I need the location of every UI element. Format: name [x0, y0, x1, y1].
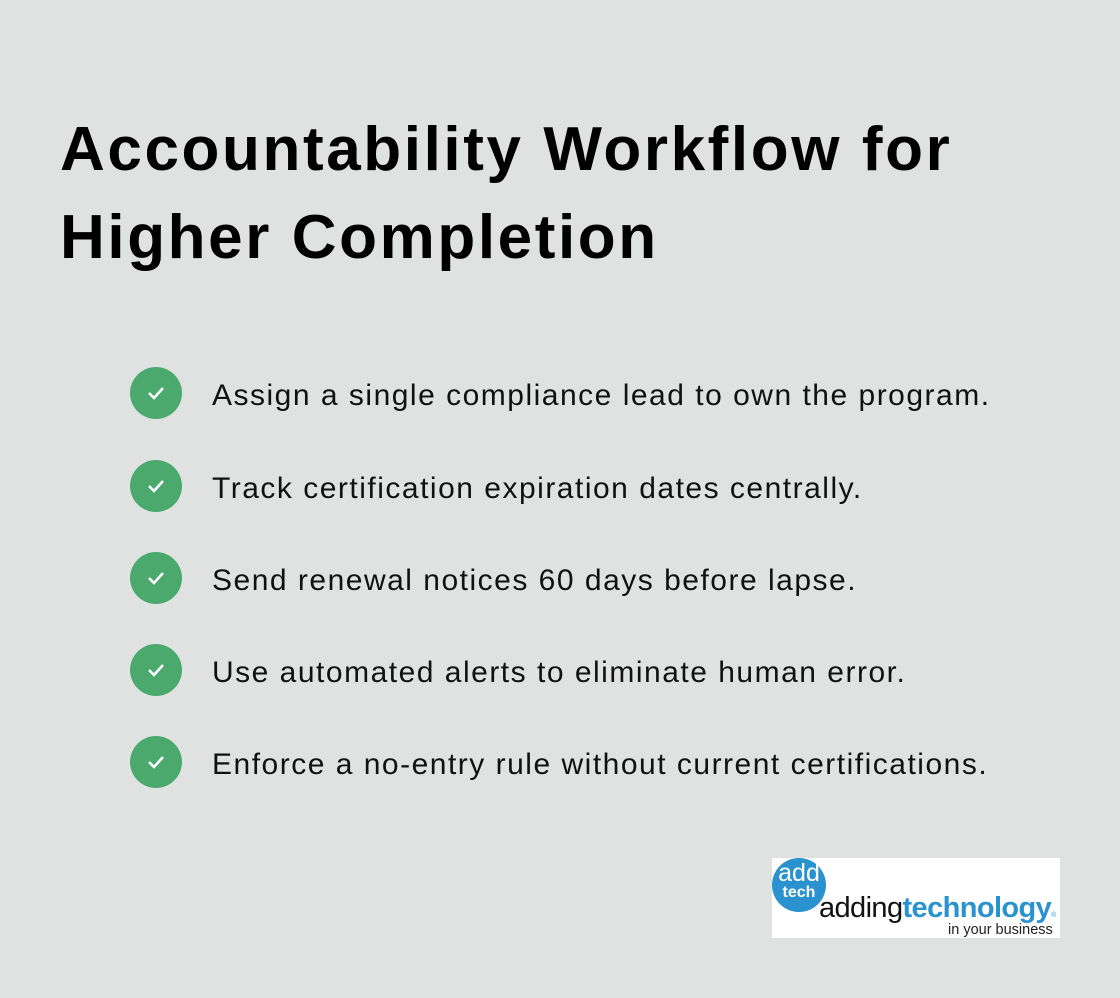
item 2 — [130, 460, 863, 512]
logo: in your business — [948, 922, 1053, 938]
item 3 — [130, 552, 857, 604]
title: Higher Completion — [60, 203, 659, 272]
item 1 — [130, 367, 991, 419]
item 4 — [130, 644, 906, 696]
item 3: Send renewal notices 60 days before lapse. — [212, 564, 857, 597]
title: Accountability Workflow for — [60, 115, 952, 184]
logo — [772, 858, 1060, 938]
logo: add — [778, 859, 820, 887]
logo: addingtechnology® — [819, 892, 1056, 924]
logo: tech — [783, 884, 815, 901]
item 2: Track certification expiration dates centrally. — [212, 472, 863, 505]
item 5 — [130, 736, 988, 788]
item 5: Enforce a no-entry rule without current certifications. — [212, 748, 988, 781]
item 4: Use automated alerts to eliminate human error. — [212, 656, 906, 689]
item 1: Assign a single compliance lead to own the program. — [212, 379, 991, 412]
title — [60, 115, 952, 272]
checklist — [130, 367, 991, 788]
